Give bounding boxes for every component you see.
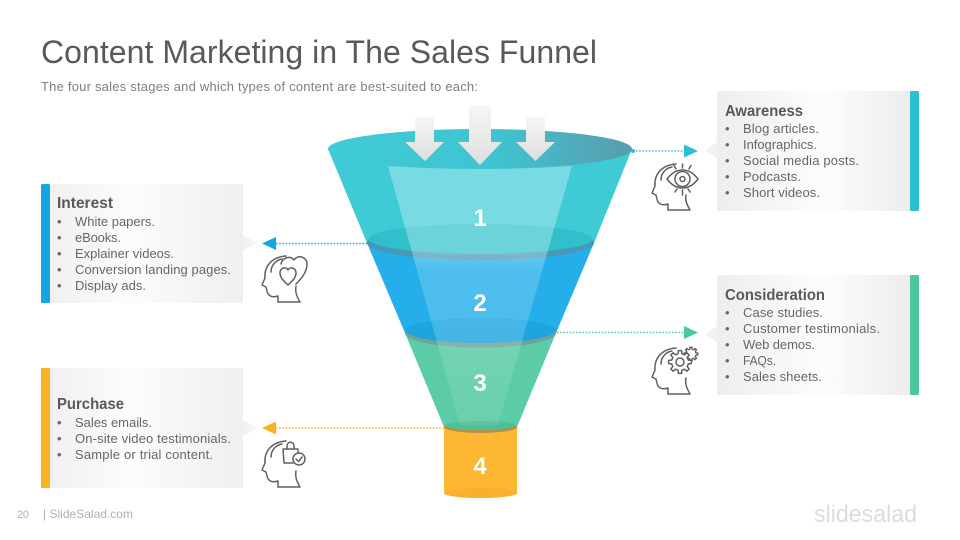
- funnel segment 2: [367, 243, 594, 348]
- accent bar: [41, 184, 50, 303]
- list: Sales sheets.: [743, 369, 822, 384]
- number 4: 4: [473, 453, 487, 480]
- list: •: [725, 353, 730, 368]
- list: •: [57, 415, 62, 430]
- list: Case studies.: [743, 305, 823, 320]
- list: FAQs.: [743, 353, 776, 368]
- heading: Purchase: [57, 396, 124, 413]
- funnel segment 3: [405, 333, 556, 427]
- number 1: 1: [473, 205, 487, 232]
- list: Conversion landing pages.: [75, 262, 231, 277]
- list: •: [725, 305, 730, 320]
- list: Short videos.: [743, 185, 820, 200]
- heading: Interest: [57, 195, 114, 212]
- funnel highlight: [388, 166, 572, 425]
- list: •: [725, 121, 730, 136]
- list: •: [725, 137, 730, 152]
- list: Podcasts.: [743, 169, 801, 184]
- pointer: [705, 142, 717, 158]
- connector: purchase: [262, 422, 444, 434]
- list: Web demos.: [743, 337, 815, 352]
- funnel: [328, 106, 632, 498]
- list: •: [725, 153, 730, 168]
- list: •: [57, 246, 62, 261]
- list: Customer testimonials.: [743, 321, 880, 336]
- list: •: [57, 214, 62, 229]
- ring between segments 1 and 2: [367, 224, 594, 260]
- list: •: [725, 369, 730, 384]
- connector: consideration: [557, 326, 698, 339]
- list: Blog articles.: [743, 121, 819, 136]
- list: •: [725, 337, 730, 352]
- heading: Consideration: [725, 287, 825, 304]
- accent bar: [910, 275, 919, 395]
- ring between segments 3 and 4: [444, 421, 517, 433]
- number 2: 2: [473, 290, 487, 317]
- list: •: [57, 278, 62, 293]
- down arrow left: [405, 117, 444, 161]
- down arrow right: [516, 117, 555, 161]
- list: White papers.: [75, 214, 155, 229]
- footer: logo: slidesalad: [814, 501, 917, 528]
- icon: head with shopping bag: [262, 441, 305, 487]
- icon: head with hearts: [262, 256, 307, 302]
- list: •: [57, 262, 62, 277]
- list: [725, 121, 859, 200]
- icon: head with eye: [652, 164, 698, 210]
- footer: page number: 20: [17, 509, 29, 521]
- pointer: [243, 235, 257, 251]
- panel: consideration: [705, 275, 919, 395]
- number 3: 3: [473, 370, 487, 397]
- list: •: [725, 321, 730, 336]
- list: •: [725, 169, 730, 184]
- pointer: [705, 326, 717, 342]
- list: •: [725, 185, 730, 200]
- list: Explainer videos.: [75, 246, 174, 261]
- list: [57, 214, 231, 293]
- ring between segments 2 and 3: [405, 318, 556, 348]
- connector: interest: [262, 237, 367, 250]
- heading: Awareness: [725, 103, 803, 120]
- list: Social media posts.: [743, 153, 859, 168]
- funnel segment 1: [328, 149, 632, 260]
- list: Infographics.: [743, 137, 817, 152]
- cylinder base shade: [444, 488, 517, 498]
- down arrow center: [458, 106, 502, 165]
- icon: head with gears: [652, 347, 698, 394]
- accent bar: [41, 368, 50, 488]
- footer: site name: | SlideSalad.com: [43, 507, 133, 521]
- list: Sample or trial content.: [75, 447, 213, 462]
- list: eBooks.: [75, 230, 121, 245]
- funnel segment 4: cylinder: [444, 427, 517, 498]
- pointer: [243, 420, 257, 436]
- title: Content Marketing in The Sales Funnel: [41, 34, 597, 70]
- funnel top rim: [328, 129, 632, 169]
- accent bar: [910, 91, 919, 211]
- panel: interest: [41, 184, 257, 303]
- connector: awareness: [631, 144, 698, 158]
- subtitle: The four sales stages and which types of content are best-suited to each:: [41, 79, 478, 94]
- list: •: [57, 447, 62, 462]
- list: Display ads.: [75, 278, 146, 293]
- panel: awareness: [705, 91, 919, 211]
- list: [725, 305, 880, 384]
- panel: purchase: [41, 368, 257, 488]
- list: On-site video testimonials.: [75, 431, 231, 446]
- list: [57, 415, 231, 462]
- list: Sales emails.: [75, 415, 152, 430]
- list: •: [57, 431, 62, 446]
- list: •: [57, 230, 62, 245]
